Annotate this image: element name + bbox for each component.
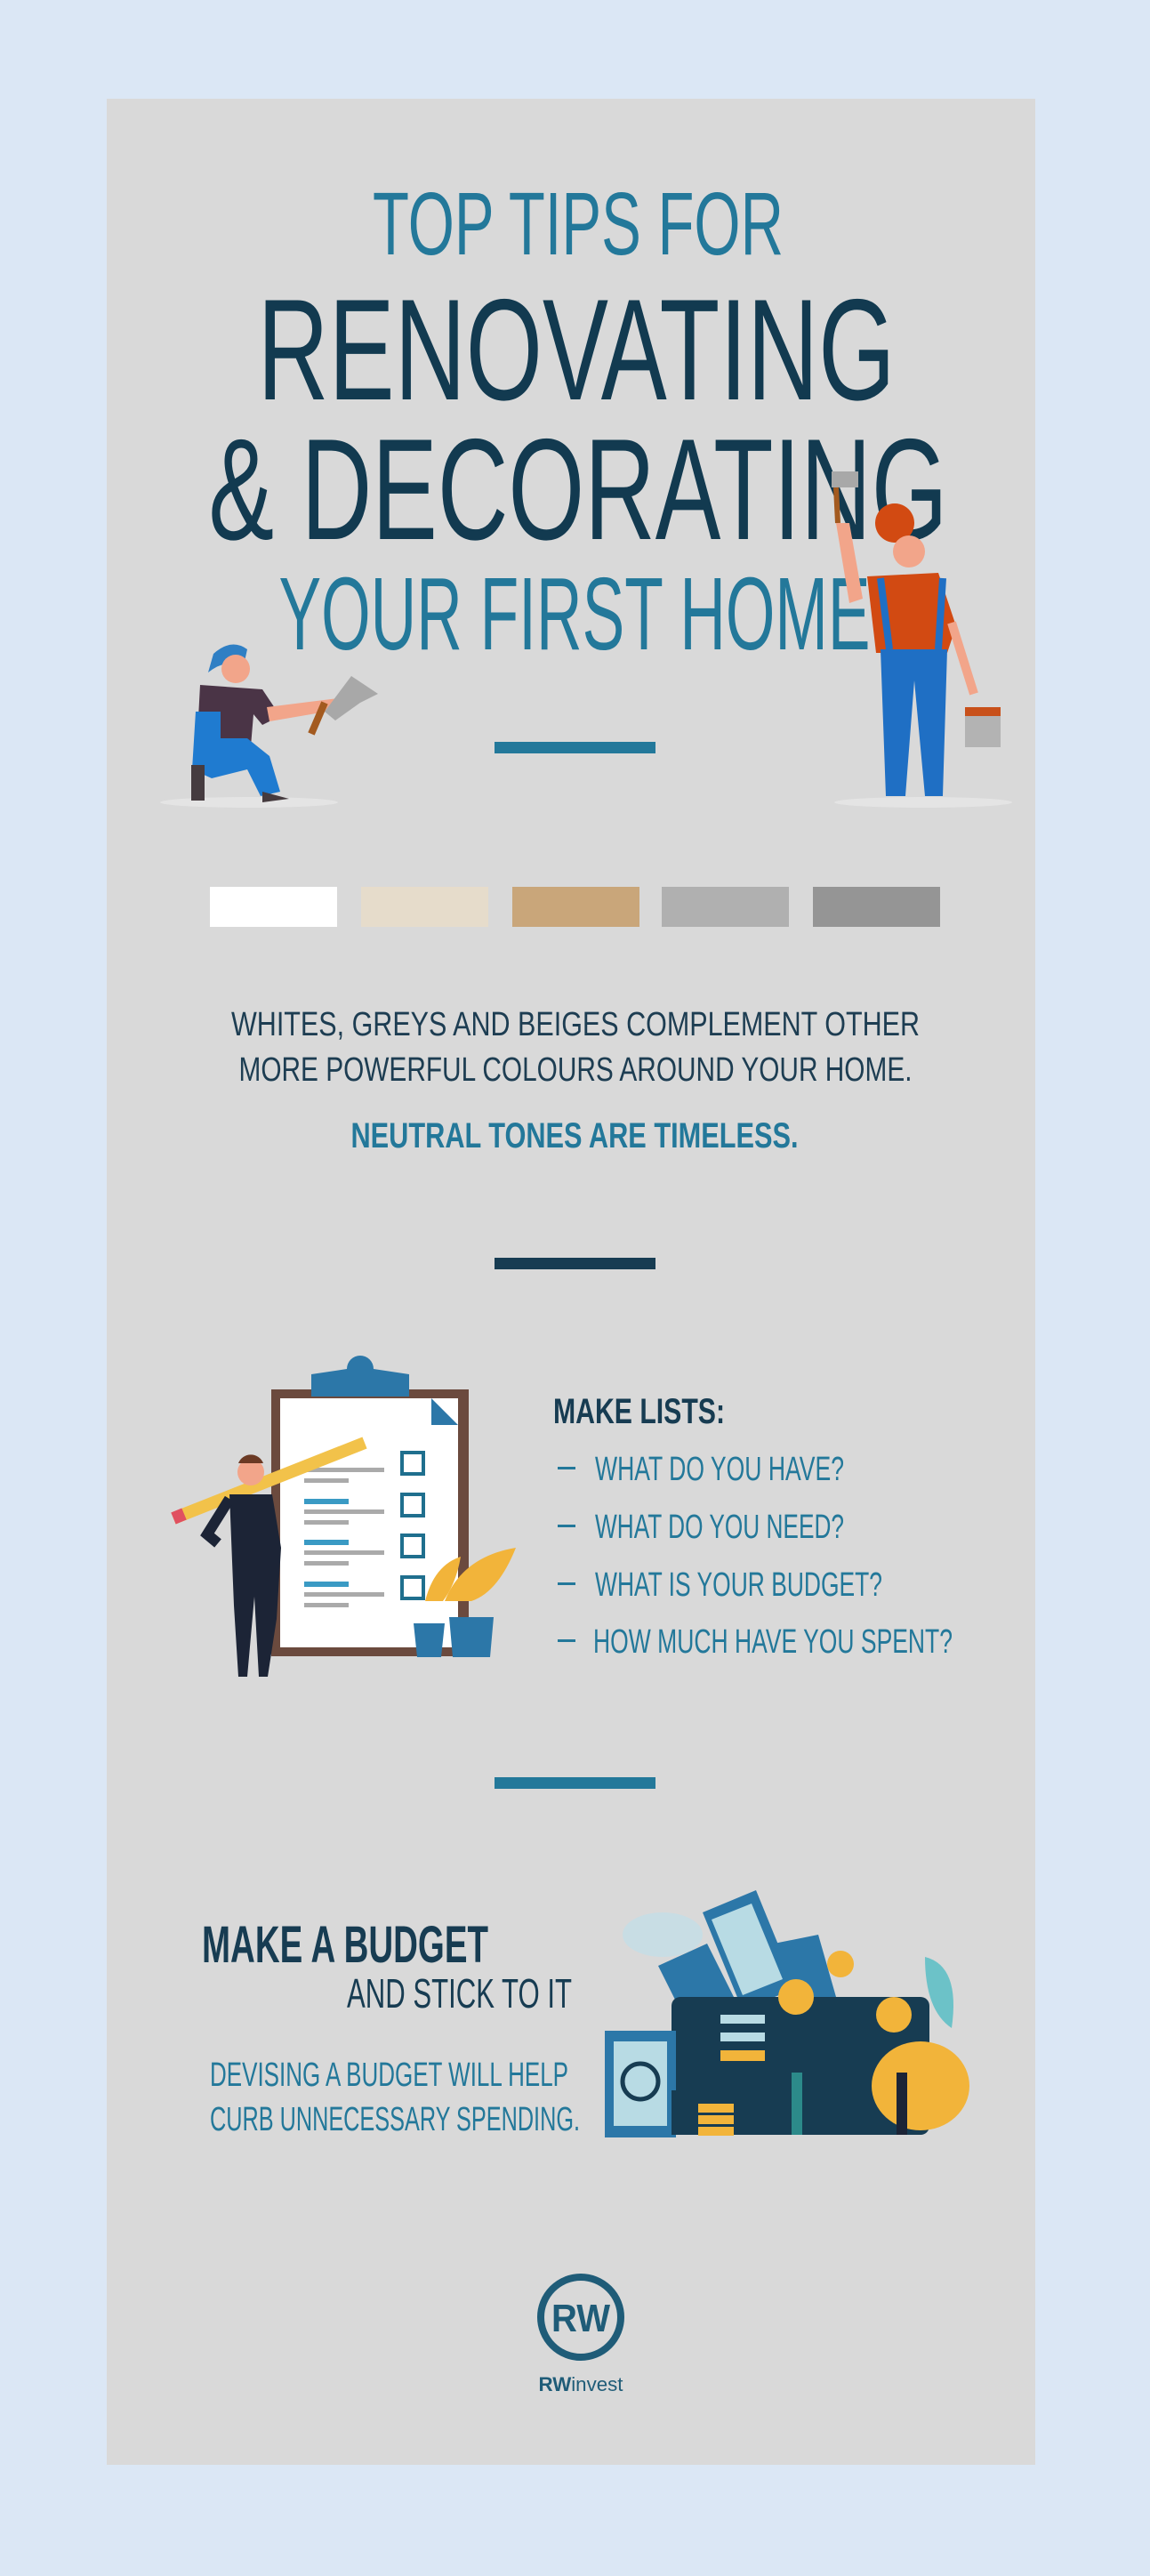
icon: clipboard with man <box>173 1356 516 1677</box>
heading: make a budget: MAKE A BUDGET <box>202 1916 488 1974</box>
text: neutral colours <box>231 1006 920 1089</box>
logo: RWinvest <box>539 2277 623 2395</box>
logo: RWinvest: RW <box>551 2297 610 2340</box>
icon: kneeling worker <box>160 645 378 808</box>
divider <box>495 742 655 753</box>
panel: main <box>107 99 1035 2465</box>
subheading: and stick to it: AND STICK TO IT <box>347 1970 572 2017</box>
list: questions: HOW MUCH HAVE YOU SPENT? <box>593 1623 953 1661</box>
logo: RWinvest: RWinvest <box>539 2373 623 2395</box>
list: questions: WHAT IS YOUR BUDGET? <box>595 1566 882 1604</box>
list: questions: WHAT DO YOU NEED? <box>595 1509 844 1546</box>
text: devising a budget <box>210 2057 580 2138</box>
text: devising a budget: CURB UNNECESSARY SPENDING. <box>210 2101 580 2138</box>
text: neutral tones are timeless: NEUTRAL TONES ARE TIMELESS. <box>350 1116 799 1155</box>
text: neutral colours: WHITES, GREYS AND BEIGES COMPLEMENT OTHER <box>231 1006 920 1043</box>
divider <box>495 1777 655 1789</box>
text: make lists: MAKE LISTS: <box>553 1392 725 1431</box>
icon: standing worker with roller <box>832 471 1012 808</box>
divider <box>495 1258 655 1269</box>
text: devising a budget: DEVISING A BUDGET WILL HELP <box>210 2057 568 2094</box>
list: questions <box>558 1451 953 1661</box>
swatches <box>210 887 940 927</box>
text: neutral colours: MORE POWERFUL COLOURS AROUND YOUR HOME. <box>238 1051 913 1089</box>
icon: wallet and piggy bank <box>605 1890 969 2137</box>
list: questions: WHAT DO YOU HAVE? <box>595 1451 844 1488</box>
title: top tips for: TOP TIPS FOR <box>373 174 784 274</box>
